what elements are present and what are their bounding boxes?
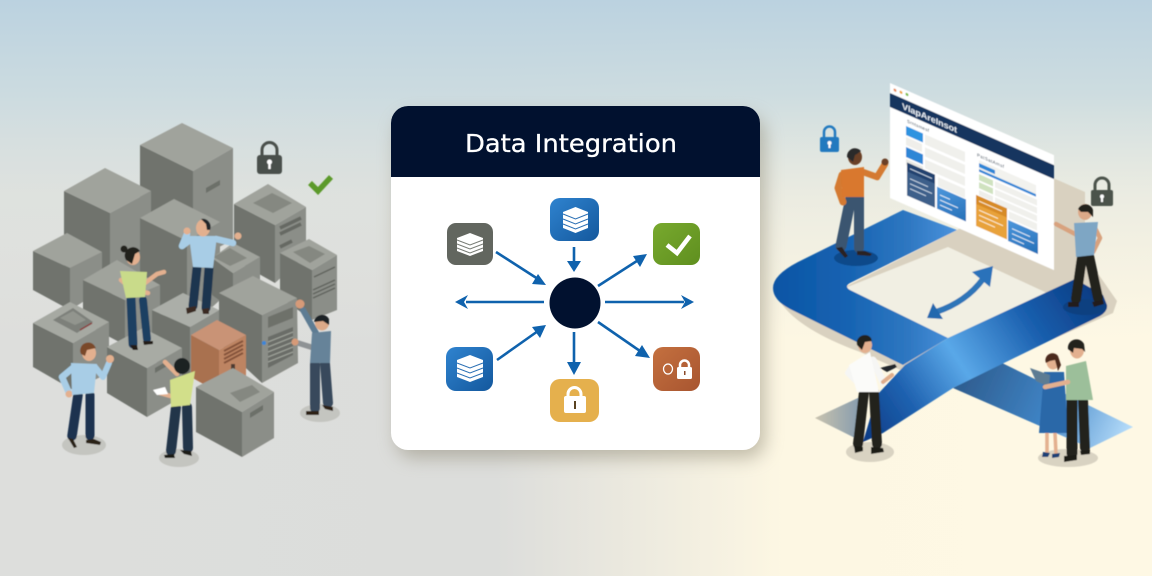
browser window dashboard xyxy=(890,83,1054,270)
box stack: grey servers xyxy=(33,123,337,457)
window title bar xyxy=(890,93,1054,179)
panel: Data Integration card xyxy=(391,106,765,458)
orange summary card xyxy=(976,195,1007,239)
central hub node xyxy=(550,278,600,328)
icon: green check tile xyxy=(653,223,700,265)
man in green shirt xyxy=(1045,339,1093,462)
illustration: scattered legacy server boxes with people xyxy=(33,123,340,467)
icon: grey padlock xyxy=(1091,178,1113,206)
ribbon: front band crossing xyxy=(863,279,1107,442)
woman in blue dress xyxy=(1039,353,1068,458)
people: woman and man with tablet xyxy=(1030,339,1098,467)
person: man in blue shirt on top of box xyxy=(182,219,242,314)
person: man in grey-blue shirt xyxy=(1056,204,1107,315)
icon: blue padlock xyxy=(820,126,839,152)
left column fields xyxy=(906,118,965,198)
icon: grey database xyxy=(447,223,493,265)
blue summary card xyxy=(937,187,966,221)
card header bar xyxy=(391,106,760,177)
person: man in orange sweater xyxy=(834,148,888,266)
right column fields: PatSatAmsf xyxy=(977,152,1005,169)
blue status card xyxy=(1008,220,1038,254)
person: man in white shirt with tablet xyxy=(846,335,897,462)
left column fields: Srntsmesf xyxy=(907,119,930,133)
navy summary card xyxy=(907,162,935,208)
icon: yellow lock tile xyxy=(550,379,599,422)
heading: Data Integration xyxy=(465,129,677,158)
icon: blue database top xyxy=(550,198,599,241)
tablet xyxy=(1030,368,1050,387)
icon: blue database lower left xyxy=(446,347,493,391)
right column fields xyxy=(977,152,1037,231)
beige platform and shadow xyxy=(781,178,1117,442)
icon: brown lock tile xyxy=(653,347,700,391)
browser window dashboard: VlapAreInsot xyxy=(902,101,957,135)
ribbon: upper-left band xyxy=(773,210,957,365)
person: man in blue shirt lower left xyxy=(62,343,114,455)
illustration: integrated platform with ribbon and people xyxy=(773,83,1133,467)
person: person in yellow shirt front xyxy=(153,358,199,467)
double-headed curved arrow xyxy=(927,266,993,319)
person: woman in yellow-green top on box xyxy=(120,246,164,350)
ribbon: far lower-right strip xyxy=(953,362,1133,448)
icon: dark padlock xyxy=(257,143,282,174)
person: man in slate sweater right xyxy=(292,300,340,422)
arrows radiating around hub xyxy=(455,247,694,375)
icon: green check mark xyxy=(310,177,331,191)
